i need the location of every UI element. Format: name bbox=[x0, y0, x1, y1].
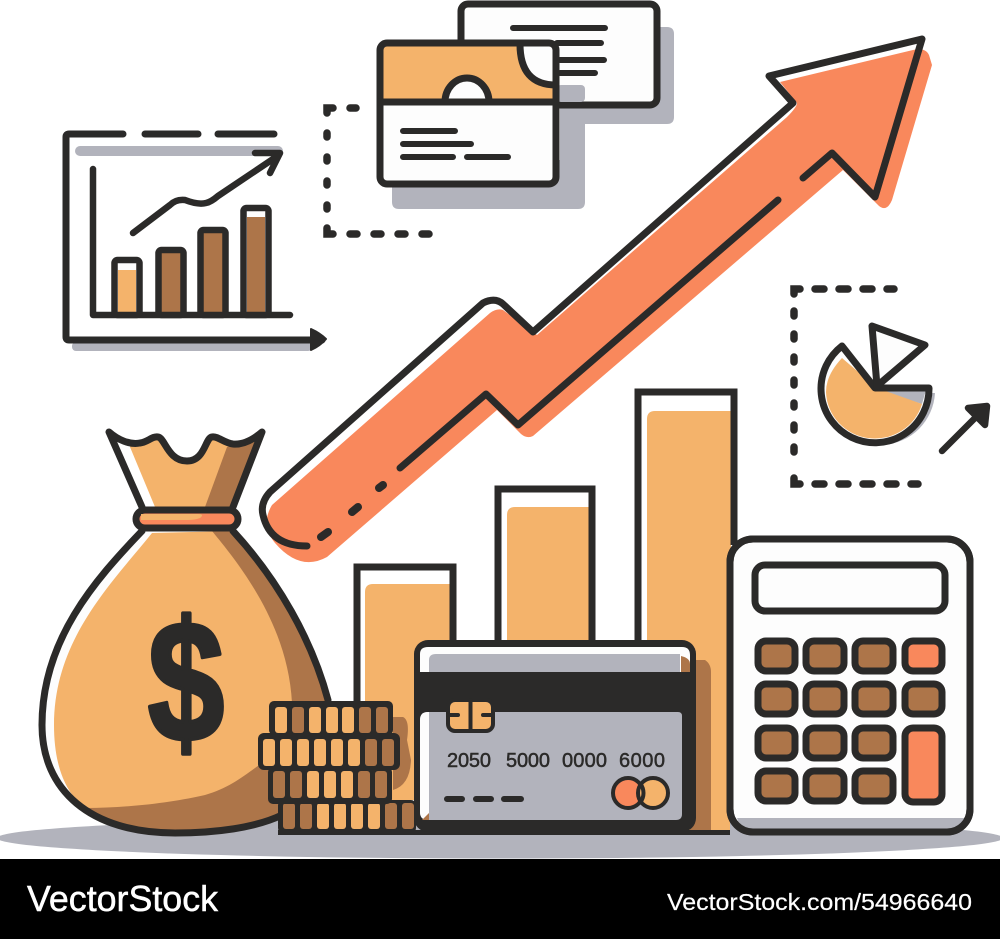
footer url: VectorStock.com/54966640 bbox=[667, 889, 972, 915]
footer bar bbox=[0, 859, 1000, 939]
card number: 0000 bbox=[562, 750, 607, 772]
card number: 6000 bbox=[619, 750, 665, 772]
coin row 2 bbox=[258, 733, 400, 770]
coin row 1 bbox=[269, 701, 393, 735]
card chip bbox=[448, 700, 493, 731]
bag neck bbox=[109, 432, 262, 507]
bag tie band bbox=[136, 510, 238, 528]
coin row 4 bbox=[278, 800, 416, 833]
credit card bbox=[414, 640, 696, 832]
panel: overlapping cards bbox=[380, 4, 674, 209]
card dashes bbox=[447, 796, 521, 802]
ground sliver under coins bbox=[245, 812, 282, 832]
bar: tall bbox=[638, 392, 734, 830]
ground shadow bbox=[0, 818, 1000, 858]
card logo bbox=[613, 778, 668, 808]
icon: small up arrow bbox=[942, 406, 987, 451]
calculator display bbox=[755, 565, 945, 611]
card number: 2050 bbox=[447, 750, 491, 772]
panel: line and bar chart bbox=[66, 134, 326, 351]
ground line bbox=[278, 830, 730, 835]
upward growth arrow bbox=[262, 39, 932, 562]
footer logo: VectorStock bbox=[27, 878, 219, 919]
calculator keys bbox=[758, 641, 942, 802]
card number bbox=[447, 750, 665, 772]
bar: short bbox=[357, 567, 453, 800]
bar: medium bbox=[498, 489, 592, 650]
calculator bbox=[730, 539, 970, 832]
dotted bracket: cards bbox=[327, 108, 429, 234]
money bag bbox=[42, 432, 328, 833]
card number: 5000 bbox=[506, 750, 550, 772]
bag body bbox=[42, 531, 328, 833]
coin row 3 bbox=[268, 767, 392, 804]
dollar sign: $ bbox=[148, 586, 224, 779]
dotted bracket: pie bbox=[794, 289, 918, 484]
coin stacks bbox=[258, 701, 416, 833]
pie chart bbox=[821, 326, 935, 445]
